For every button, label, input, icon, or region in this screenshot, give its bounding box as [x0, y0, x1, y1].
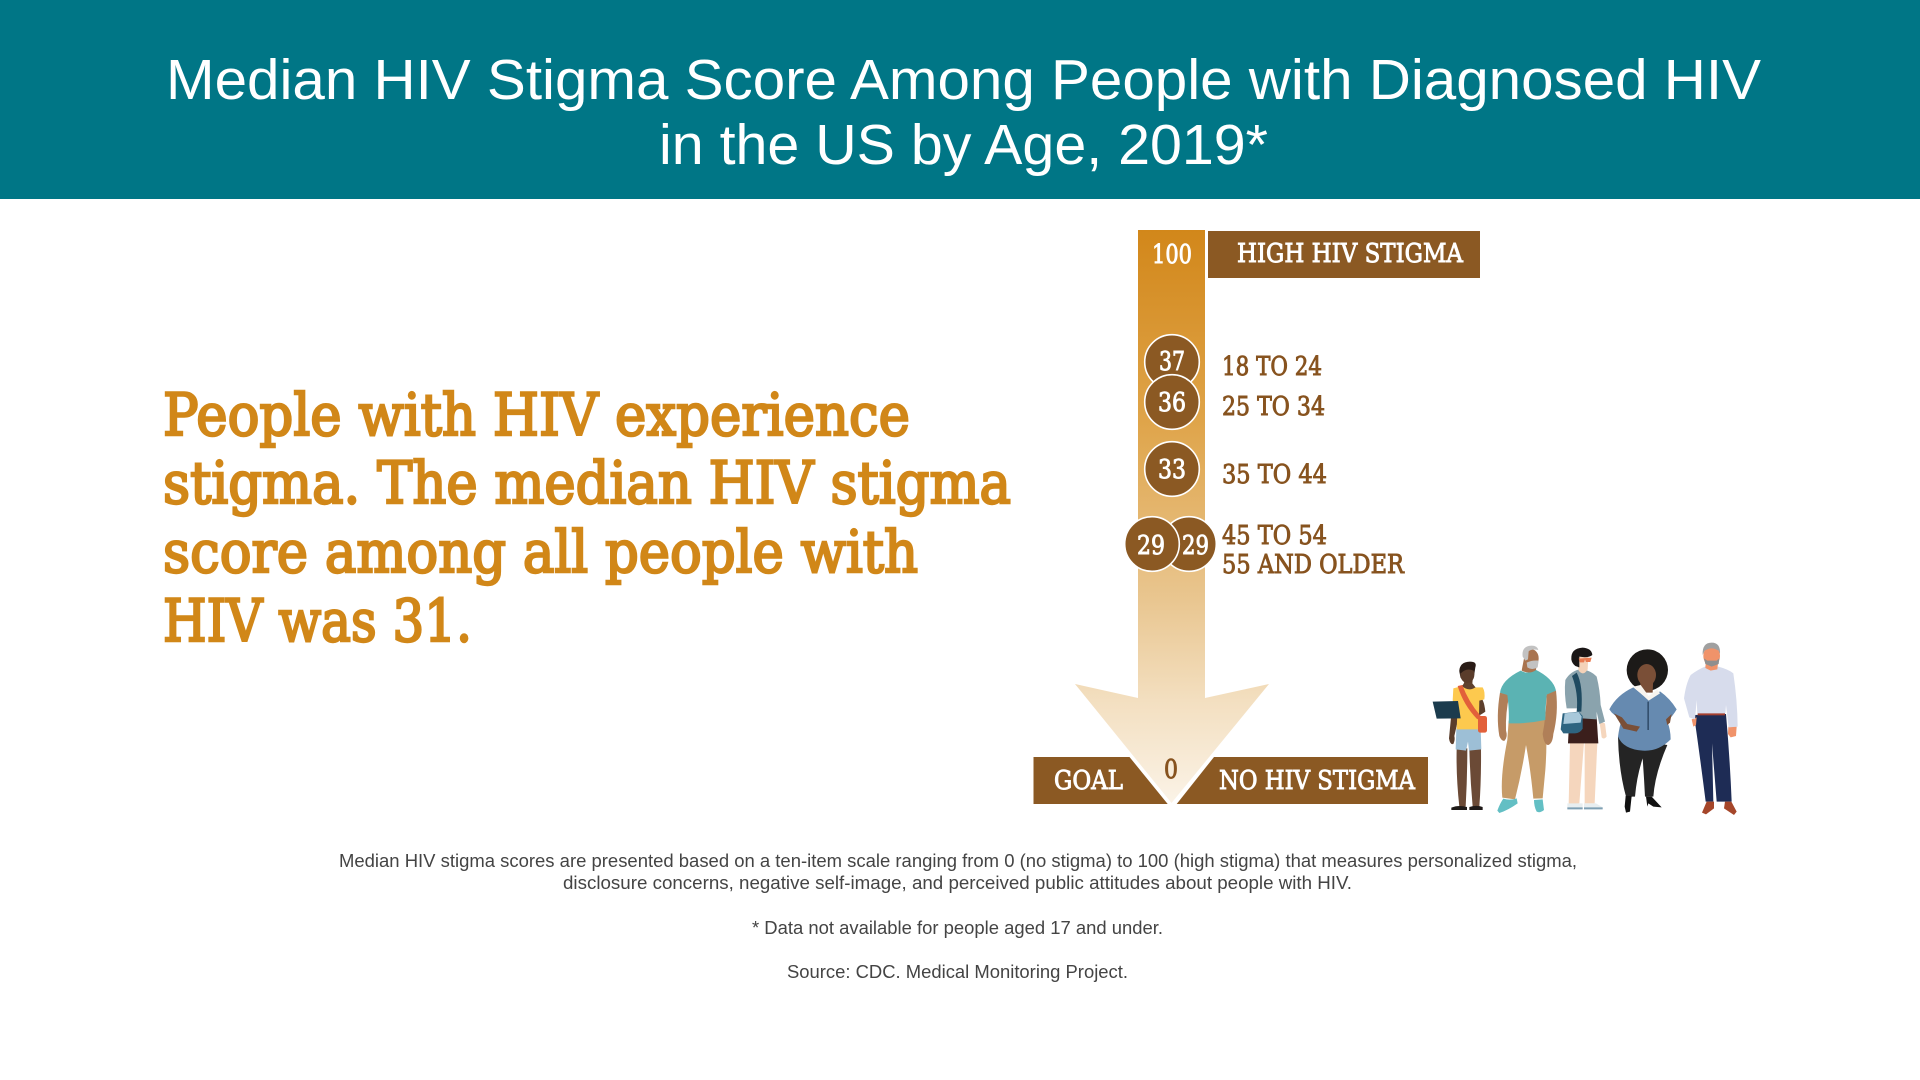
age labels: 18 TO 24: [1222, 352, 1322, 382]
no HIV stigma label: [1177, 757, 1428, 804]
marker 29, age 45 to 54: 29: [1137, 531, 1165, 561]
age labels: 55 AND OLDER: [1222, 550, 1405, 580]
marker 29, age 55 and older: 29: [1182, 531, 1209, 561]
key message text block: People with HIV experience: [163, 381, 910, 449]
high HIV stigma label: HIGH HIV STIGMA: [1237, 239, 1464, 269]
key message text block: score among all people with: [163, 518, 918, 586]
person: woman in blue blouse: [1609, 649, 1677, 813]
title line 2: in the US by Age, 2019*: [659, 113, 1268, 177]
goal label: GOAL: [1054, 766, 1123, 796]
data availability note: * Data not available for people aged 17 and under.: [752, 917, 1163, 938]
age labels: 25 TO 34: [1222, 392, 1325, 422]
marker 36: [1145, 375, 1199, 429]
person: older man in teal shirt: [1497, 646, 1557, 813]
goal label: [1034, 757, 1168, 804]
scale top value 100: 100: [1152, 240, 1192, 270]
marker 33: [1145, 442, 1199, 496]
methodology note: [339, 850, 1577, 893]
no HIV stigma label: NO HIV STIGMA: [1219, 766, 1416, 796]
methodology note: disclosure concerns, negative self-image, and perceived public attitudes about people with HIV.: [563, 872, 1352, 893]
gradient arrow: [1075, 230, 1269, 803]
marker 33: 33: [1158, 455, 1186, 485]
key message text block: HIV was 31.: [163, 587, 472, 655]
marker 37: 37: [1159, 347, 1185, 377]
person: man in dress shirt: [1684, 643, 1738, 815]
age labels: 35 TO 44: [1222, 460, 1327, 490]
source line: Source: CDC. Medical Monitoring Project.: [787, 961, 1128, 982]
scale bottom value 0: 0: [1164, 755, 1178, 785]
key message text block: stigma. The median HIV stigma: [163, 449, 1011, 517]
person: woman with shoulder bag: [1561, 648, 1607, 809]
age labels: [1222, 352, 1405, 580]
illustration: group of five people: [1433, 643, 1738, 815]
title line 1: Median HIV Stigma Score Among People with Diagnosed HIV: [166, 48, 1761, 112]
marker 29, age 45 to 54: [1125, 517, 1179, 571]
arrow scale chart: [1034, 230, 1480, 804]
header banner: [0, 0, 1920, 199]
marker 37: [1145, 335, 1199, 389]
key message text block: [163, 381, 1011, 655]
marker 29, age 55 and older: [1162, 517, 1216, 571]
marker 36: 36: [1158, 388, 1186, 418]
person: woman with laptop: [1433, 662, 1487, 810]
footnotes text block: [339, 850, 1577, 982]
high HIV stigma label: [1208, 231, 1480, 278]
age labels: 45 TO 54: [1222, 521, 1327, 551]
methodology note: Median HIV stigma scores are presented based on a ten-item scale ranging from 0 (no stigma) to 100 (high stigma) that measures personalized stigma,: [339, 850, 1577, 871]
